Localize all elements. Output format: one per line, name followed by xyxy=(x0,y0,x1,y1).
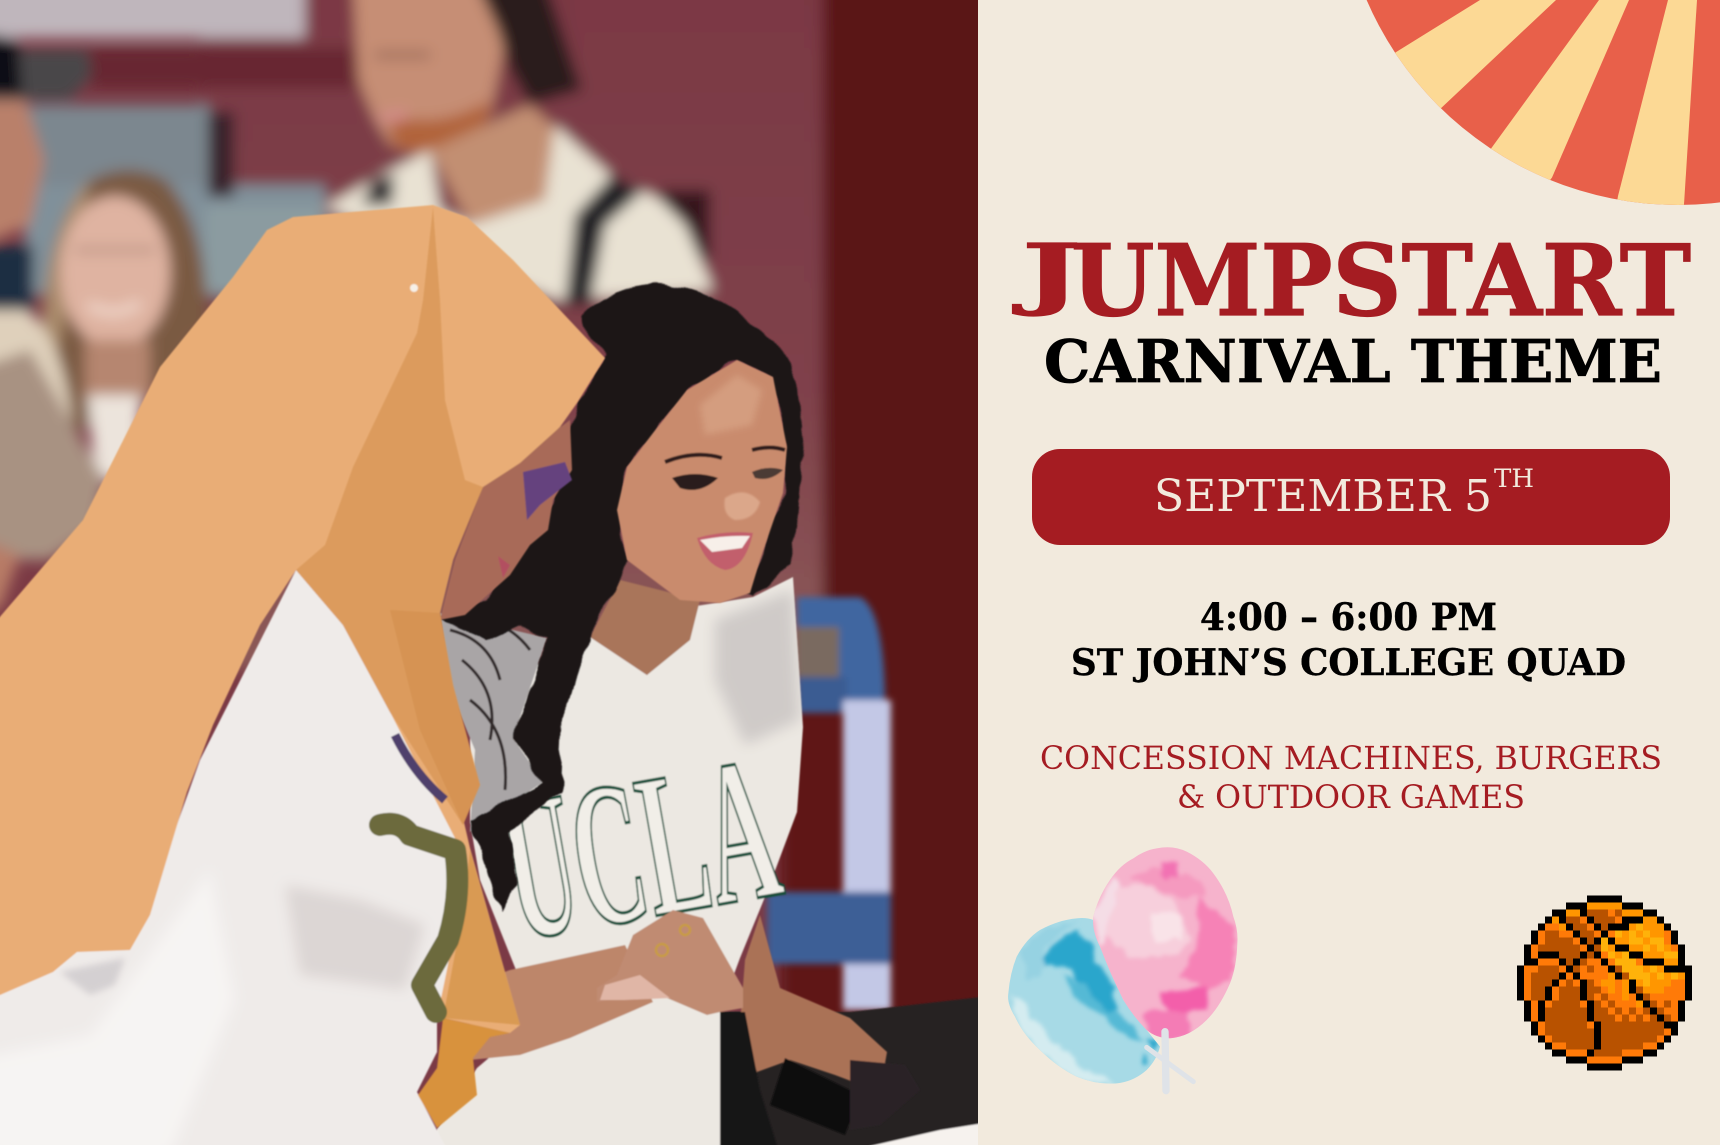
woman in hijab xyxy=(0,205,605,1145)
title: UMPSTART xyxy=(1071,224,1691,339)
shirt shading xyxy=(715,590,800,745)
date pill xyxy=(1032,449,1670,545)
watch strap and phone xyxy=(720,1012,780,1145)
UCLA shirt lettering: UCLA xyxy=(486,714,794,984)
photo: students at carnival xyxy=(0,0,1023,1145)
translucent hair over sleeve xyxy=(440,613,547,832)
left arm xyxy=(470,945,653,1060)
hand xyxy=(626,909,744,1016)
girl face xyxy=(617,360,787,603)
stick xyxy=(1154,1032,1177,1091)
blurred woman xyxy=(40,170,208,430)
icon: pixel basketball xyxy=(1517,899,1692,1067)
time: 4:00 – 6:00 PM xyxy=(1200,595,1497,639)
activities xyxy=(1040,739,1662,816)
photo background: blurred room and bystanders xyxy=(0,0,978,1012)
shirt xyxy=(420,577,803,1145)
hijab xyxy=(0,205,605,1033)
activities: CONCESSION MACHINES, BURGERS xyxy=(1040,739,1662,777)
left coat xyxy=(0,310,72,430)
girl in UCLA shirt xyxy=(420,577,920,1145)
sunburst decoration xyxy=(1366,0,1720,205)
date pill: TH xyxy=(1494,464,1534,493)
white sweater xyxy=(0,570,470,1145)
sweater trim xyxy=(380,824,457,1012)
date pill: SEPTEMBER 5 xyxy=(1154,471,1492,522)
blue cotton candy xyxy=(1008,918,1160,1084)
subtitle: CARNIVAL THEME xyxy=(1044,327,1662,396)
sweater shading xyxy=(285,885,425,990)
title: J xyxy=(1012,228,1081,319)
girl hair xyxy=(440,283,803,912)
left man xyxy=(0,35,92,100)
photo: dark table and bag xyxy=(720,996,990,1145)
hijab flap xyxy=(418,1018,510,1128)
photo: blue shelf xyxy=(767,597,891,1010)
right arm xyxy=(740,915,887,1092)
man in background xyxy=(430,105,562,225)
icon: cotton candy xyxy=(1000,840,1243,1091)
pink cotton candy xyxy=(1093,847,1238,1038)
location: ST JOHN’S COLLEGE QUAD xyxy=(1071,642,1626,684)
neck xyxy=(590,580,700,675)
activities: & OUTDOOR GAMES xyxy=(1177,778,1525,816)
face xyxy=(440,420,572,620)
